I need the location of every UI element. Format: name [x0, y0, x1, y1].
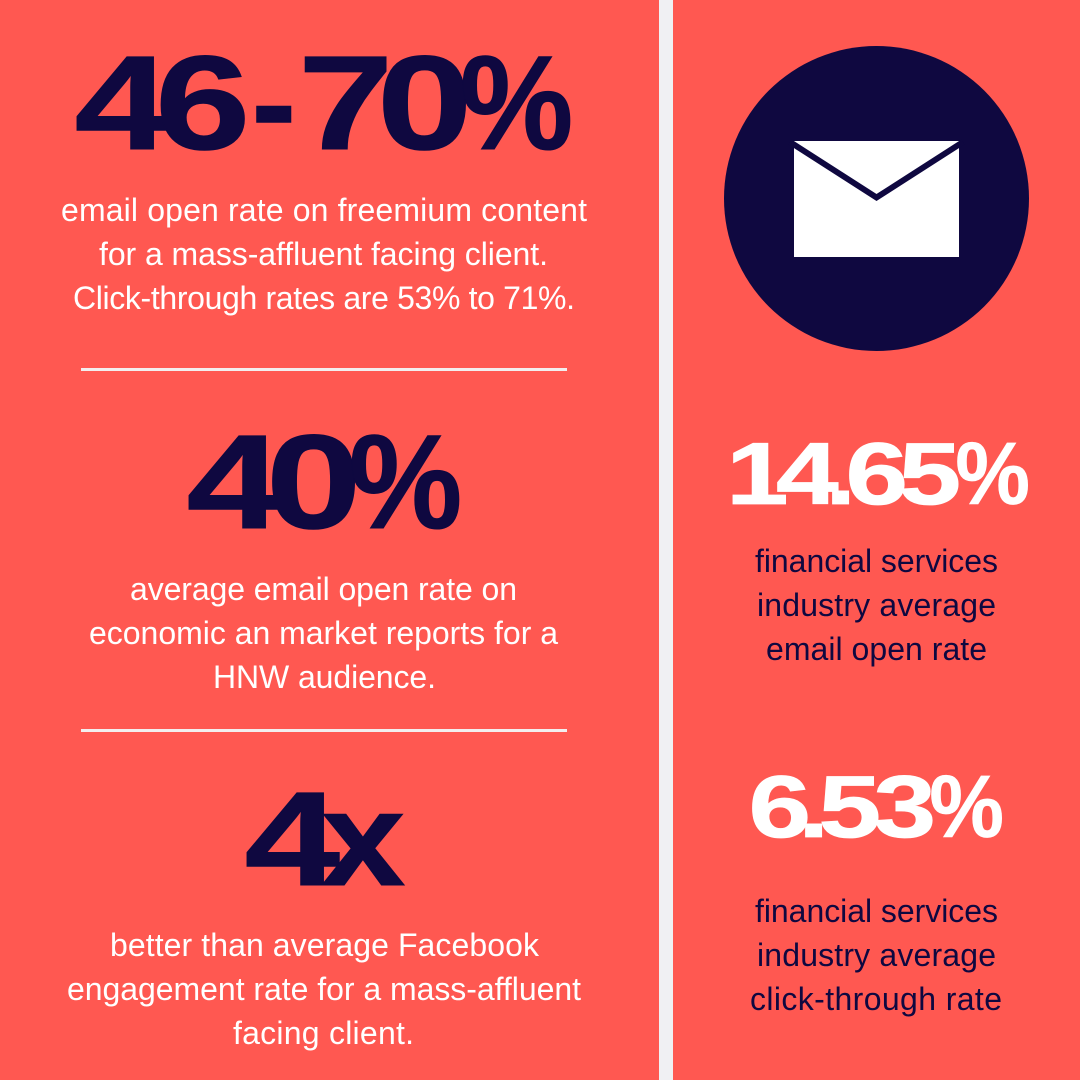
stat: 46-70%: 7: [298, 28, 393, 178]
text: Facebook engagement description: facing client.: [233, 1015, 414, 1051]
text: freemium open rate description: Click-through rates are 53% to 71%.: [73, 280, 575, 316]
stat: 40%: 0: [266, 407, 361, 557]
text: industry click-through description: click-through rate: [750, 981, 1002, 1017]
text: freemium open rate description: [61, 192, 587, 316]
stat: 4x: [245, 764, 405, 914]
text: industry open rate description: email open rate: [766, 631, 987, 667]
text: freemium open rate description: for a mass-affluent facing client.: [99, 236, 548, 272]
text: Facebook engagement description: better than average Facebook: [110, 927, 540, 963]
stat: 4x: 4: [245, 764, 340, 914]
stat: 46-70%: 0: [377, 28, 472, 178]
text: industry click-through description: financial services: [755, 893, 998, 929]
stat: 40%: [187, 407, 462, 557]
stat: 6.53%: 6: [748, 759, 811, 856]
text: HNW report description: HNW audience.: [213, 659, 436, 695]
text: HNW report description: [89, 571, 558, 695]
text: HNW report description: economic an market reports for a: [89, 615, 558, 651]
text: Facebook engagement description: engagement rate for a mass-affluent: [67, 971, 581, 1007]
stat: 4x: x: [321, 765, 405, 914]
text: industry open rate description: financial services: [755, 543, 998, 579]
stat: 46-70%: %: [460, 28, 573, 178]
text: HNW report description: average email open rate on: [130, 571, 517, 607]
stat: 6.53%: [748, 758, 1004, 856]
stat: 14.65%: [726, 425, 1030, 523]
stat: 14.65%: 4: [776, 426, 839, 523]
text: industry click-through description: [750, 893, 1002, 1017]
stat: 14.65%: 5: [898, 426, 961, 523]
icon: email envelope in circle: [724, 46, 1029, 351]
stat: 46-70%: [75, 28, 573, 178]
stat: 14.65%: 1: [726, 426, 789, 523]
stat: 6.53%: %: [930, 758, 1004, 856]
text: freemium open rate description: email open rate on freemium content: [61, 192, 587, 228]
stat: 6.53%: 3: [874, 759, 936, 856]
stat: 46-70%: -: [252, 29, 296, 178]
stat: 46-70%: 6: [155, 28, 250, 178]
stat: 6.53%: 5: [818, 759, 881, 856]
stat: 14.65%: %: [956, 425, 1030, 523]
stat: 46-70%: 4: [75, 28, 170, 178]
stat: 40%: 4: [187, 407, 282, 557]
text: industry open rate description: [755, 543, 998, 667]
text: industry open rate description: industry average: [757, 587, 996, 623]
stat: 6.53%: .: [798, 759, 829, 856]
stat: 14.65%: .: [825, 426, 856, 523]
text: industry click-through description: industry average: [757, 937, 996, 973]
text: Facebook engagement description: [67, 927, 581, 1051]
stat: 40%: %: [349, 407, 462, 557]
stat: 14.65%: 6: [846, 426, 908, 523]
